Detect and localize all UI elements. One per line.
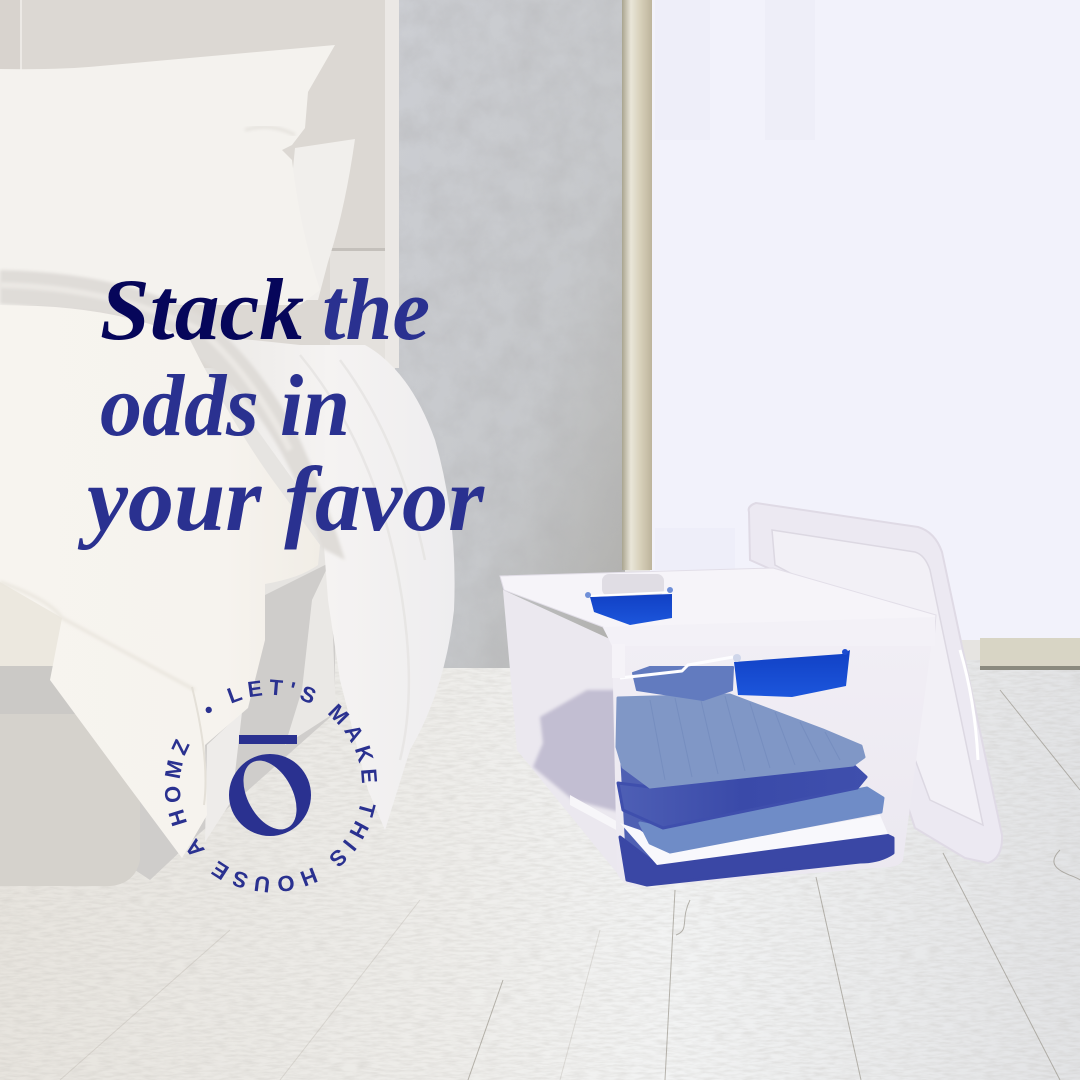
blue latch handles [585, 574, 850, 697]
storage lid leaning behind box [749, 503, 1002, 863]
floor [0, 660, 1080, 1080]
circular slogan: • LET'S MAKE THIS HOUSE A HOMZ [164, 679, 378, 892]
headline: odds in [100, 358, 350, 455]
pillows [0, 45, 355, 305]
bed base and under-bed shadow [0, 560, 336, 886]
concrete wall [395, 0, 625, 668]
draped white sheet [205, 335, 455, 830]
badge: let's make this house a homz [164, 679, 378, 892]
storage box [500, 568, 936, 887]
headline: Stack [100, 262, 304, 359]
folded clothes stack [617, 657, 893, 885]
box side panel [503, 590, 637, 887]
box front panel [612, 640, 932, 887]
mirror [622, 0, 1080, 670]
clothes behind side panel [533, 690, 620, 832]
box rim and lid top [500, 568, 936, 678]
headline [77, 262, 485, 550]
bed headboard [0, 0, 399, 368]
cream drape [0, 305, 320, 858]
logo mark [229, 735, 311, 836]
duvet fold band [0, 270, 345, 560]
headline: your favor [77, 448, 485, 550]
headline: the [322, 262, 430, 359]
